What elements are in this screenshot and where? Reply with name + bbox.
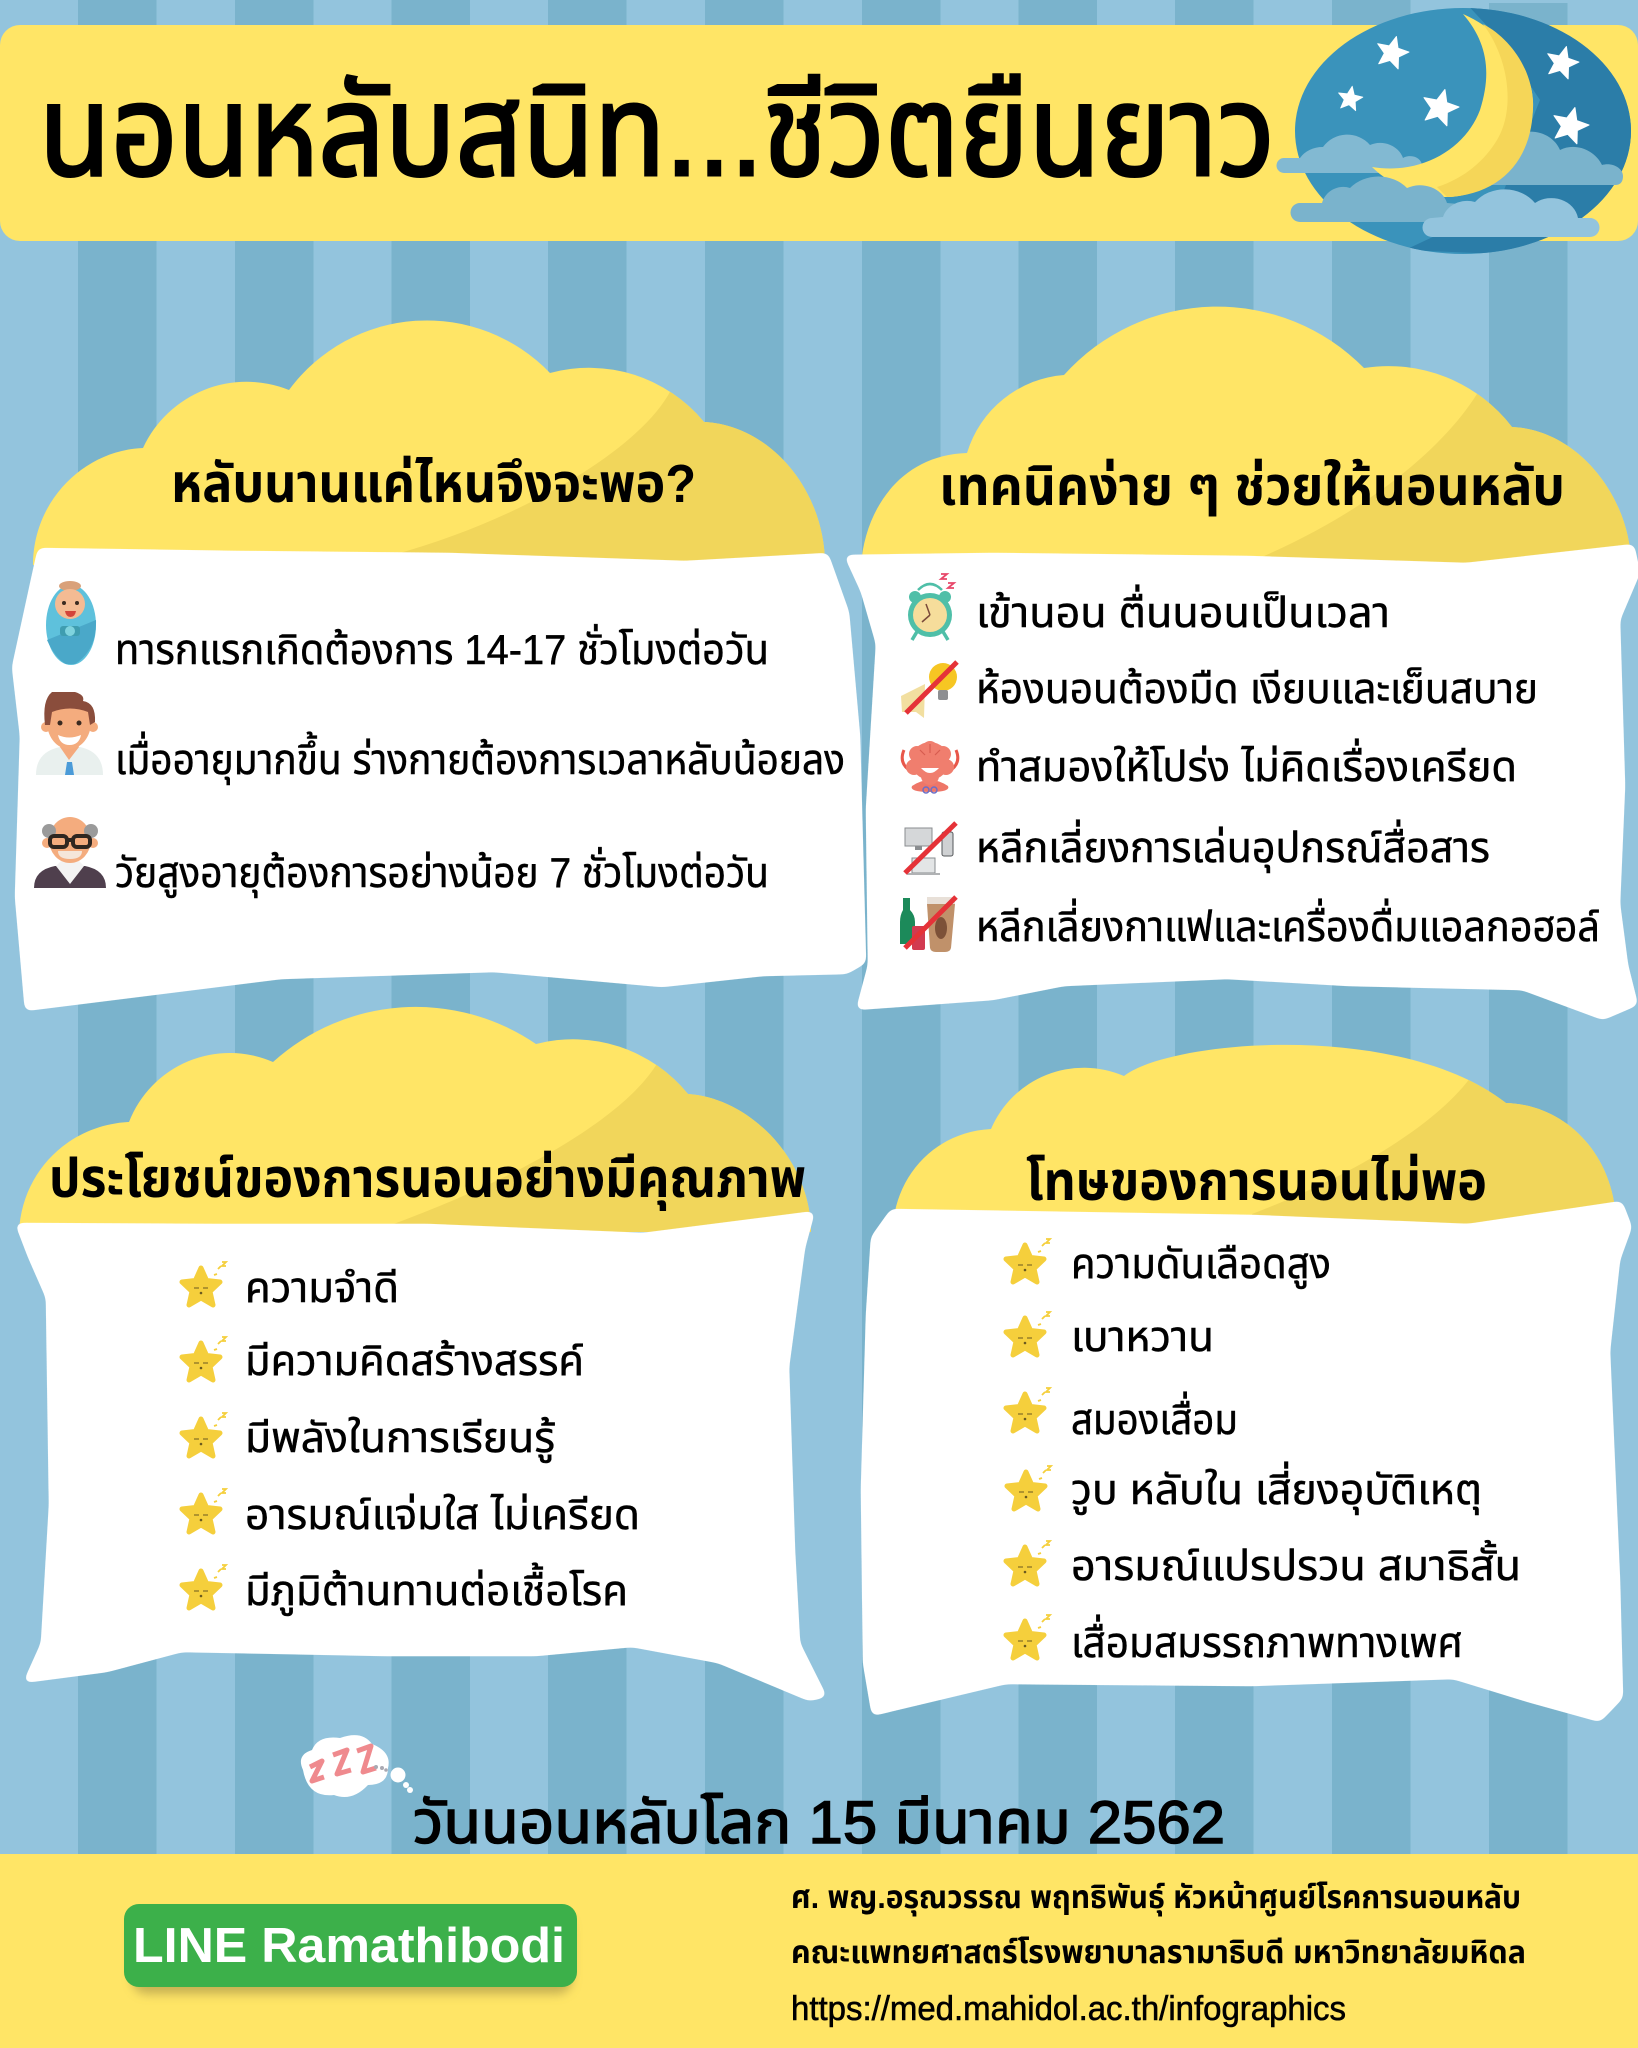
panel 1 cloud header	[33, 320, 824, 565]
panel 2 item 5: หลีกเลี่ยงกาแฟและเครื่องดื่มแอลกอฮอล์	[976, 898, 1600, 950]
panel 4 item 2: เบาหวาน	[1071, 1313, 1214, 1360]
star icons	[182, 1262, 226, 1608]
panel 2 item 1: เข้านอน ตื่นนอนเป็นเวลา	[976, 584, 1390, 636]
credit line 1: ศ. พญ.อรุณวรรณ พฤทธิพันธุ์ หัวหน้าศูนย์โรคการนอนหลับ	[791, 1879, 1521, 1916]
title banner	[0, 25, 1638, 241]
panel 3 item 5: มีภูมิต้านทานต่อเชื้อโรค	[245, 1562, 628, 1616]
panel: harms of too little sleep	[861, 1000, 1638, 1722]
icon: relaxed brain	[902, 741, 958, 793]
panel: how long to sleep	[12, 300, 866, 1011]
panel 1 item 3: วัยสูงอายุต้องการอย่างน้อย 7 ชั่วโมงต่อวัน	[115, 846, 769, 898]
panel 3 cloud header	[20, 1006, 811, 1232]
icon: no coffee or alcohol	[900, 897, 956, 952]
panel 3 heading: ประโยชน์ของการนอนอย่างมีคุณภาพ	[49, 1149, 806, 1211]
icon: baby	[46, 581, 96, 665]
panel 2 item 2: ห้องนอนต้องมืด เงียบและเย็นสบาย	[976, 665, 1538, 712]
panel 1 item 2: เมื่ออายุมากขึ้น ร่างกายต้องการเวลาหลับน้อยลง	[115, 731, 845, 785]
icon: alarm clock	[908, 574, 954, 640]
panel 1 white card	[12, 548, 866, 1011]
panel 3 item 2: มีความคิดสร้างสรรค์	[245, 1337, 584, 1384]
star icons	[1006, 1239, 1051, 1658]
panel 2 item 3: ทำสมองให้โปร่ง ไม่คิดเรื่องเครียด	[976, 738, 1517, 790]
panel 4 heading: โทษของการนอนไม่พอ	[1026, 1152, 1487, 1212]
panel 4 item 5: อารมณ์แปรปรวน สมาธิสั้น	[1071, 1539, 1521, 1589]
footer band	[0, 1789, 1638, 2048]
panel 4 item 6: เสื่อมสมรรถภาพทางเพศ	[1071, 1614, 1463, 1666]
panel 3 item 3: มีพลังในการเรียนรู้	[245, 1414, 555, 1463]
credit line 2: คณะแพทยศาสตร์โรงพยาบาลรามาธิบดี มหาวิทยาลัยมหิดล	[791, 1934, 1526, 1970]
icon: no light	[901, 662, 957, 718]
icon: zzz thought cloud	[301, 1735, 413, 1797]
event date text: วันนอนหลับโลก 15 มีนาคม 2562	[413, 1789, 1225, 1856]
panel 4 cloud header	[896, 1044, 1614, 1224]
panel 3 white card	[15, 1211, 827, 1701]
panel 2 heading: เทคนิคง่าย ๆ ช่วยให้นอนหลับ	[939, 457, 1565, 517]
panel: easy sleep techniques	[844, 300, 1638, 1020]
panel 1 item 1: ทารกแรกเกิดต้องการ 14-17 ชั่วโมงต่อวัน	[115, 623, 769, 673]
title: นอนหลับสนิท...ชีวิตยืนยาว	[39, 60, 1275, 202]
icon: moon and clouds	[1277, 0, 1638, 260]
panel 2 item 4: หลีกเลี่ยงการเล่นอุปกรณ์สื่อสาร	[976, 819, 1490, 873]
icon: no devices	[905, 823, 956, 875]
icon: older man	[34, 817, 106, 888]
LINE button: LINE Ramathibodi	[133, 1919, 565, 1973]
LINE button	[124, 1904, 577, 1994]
panel 4 white card	[861, 1201, 1632, 1722]
panel 3 item 4: อารมณ์แจ่มใส ไม่เครียด	[245, 1491, 640, 1538]
panel: benefits of quality sleep	[15, 1000, 830, 1701]
icon: adult man	[36, 692, 103, 775]
panel 4 item 1: ความดันเลือดสูง	[1071, 1240, 1331, 1289]
panel 2 cloud header	[862, 306, 1630, 563]
panel 4 item 4: วูบ หลับใน เสี่ยงอุบัติเหตุ	[1071, 1461, 1482, 1515]
panel 1 heading: หลับนานแค่ไหนจึงจะพอ?	[171, 454, 696, 514]
panel 2 white card	[844, 544, 1638, 1020]
panel 4 item 3: สมองเสื่อม	[1071, 1391, 1238, 1443]
credit line 3: url: https://med.mahidol.ac.th/infographics	[791, 1990, 1346, 2028]
panel 3 item 1: ความจำดี	[245, 1264, 399, 1311]
